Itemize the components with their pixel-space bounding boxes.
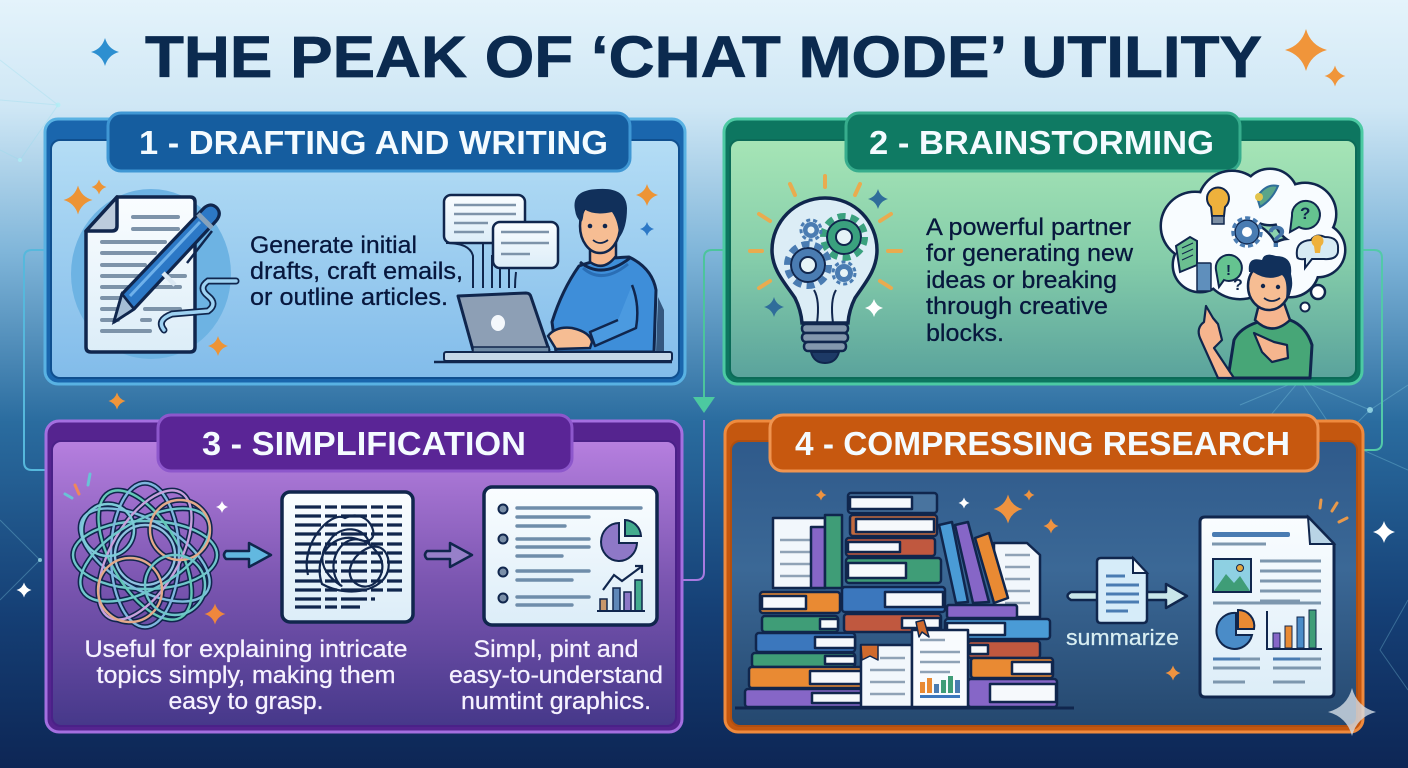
arrow: document to summary — [425, 543, 472, 567]
text: panel 3 left description: easy to grasp. — [168, 688, 324, 715]
text: panel 2 description: blocks. — [926, 320, 1004, 347]
icon: orange sparkle between panels — [108, 392, 126, 410]
icon: dense document with scribble — [282, 492, 413, 622]
centre stack — [842, 493, 945, 632]
text: panel 1 description — [250, 232, 463, 311]
text: panel 3 right description — [449, 636, 663, 715]
panel: drafting and writing — [45, 113, 685, 384]
heading tab 2 — [846, 113, 1240, 171]
panel: compressing research — [725, 415, 1363, 732]
icon: tangled knot — [65, 474, 228, 634]
icon: large orange sparkle top right — [1285, 29, 1327, 71]
icon: white sparkle right — [1373, 521, 1395, 543]
icon: stack of books and papers — [735, 490, 1074, 708]
text: panel 3 right description: numtint graphics. — [461, 688, 651, 715]
heading tab 3 — [158, 415, 572, 471]
arrow: summarize — [1068, 558, 1187, 623]
heading tab 1: 1 - DRAFTING AND WRITING — [139, 124, 608, 161]
connector: panel 2 down arrow — [693, 250, 723, 413]
icon: person with thought cloud: ? — [1300, 204, 1310, 223]
icon: person with thought cloud: ! — [1226, 262, 1231, 279]
icon: small orange sparkle — [1166, 666, 1180, 680]
icon: person at laptop with chat bubbles — [434, 184, 672, 362]
front papers — [861, 620, 968, 707]
icon: sparkle top left — [91, 38, 119, 66]
icon: small orange sparkle top right — [1324, 66, 1346, 86]
arrow: knot to document — [224, 543, 271, 567]
connector: panel 1 to panel 3 — [24, 250, 46, 470]
icon: person with thought cloud — [1162, 170, 1344, 378]
panel: brainstorming — [724, 113, 1362, 384]
heading tab 4: 4 - COMPRESSING RESEARCH — [795, 425, 1290, 462]
text: panel 3 left description — [84, 636, 408, 715]
connector: panel 2 to panel 4 — [1362, 250, 1382, 450]
text: panel 2 description: ideas or breaking — [926, 267, 1117, 294]
heading tab 1 — [108, 113, 630, 171]
icon: white sparkle left — [16, 582, 32, 598]
connector: panel 3 to middle — [682, 420, 704, 580]
heading tab 2: 2 - BRAINSTORMING — [869, 124, 1214, 161]
icon: person with thought cloud: ? — [1267, 219, 1286, 254]
left stack — [745, 592, 863, 707]
icon: simplified summary sheet — [484, 487, 657, 625]
icon: document and pen — [64, 180, 236, 359]
right stack — [945, 605, 1057, 707]
icon: summary report — [1200, 500, 1347, 697]
text: panel 3 right description: Simpl, pint and — [474, 636, 638, 663]
text: panel 2 description: for generating new — [926, 240, 1133, 267]
panel: simplification — [46, 415, 682, 732]
text: panel 1 description: Generate initial — [250, 232, 417, 259]
text: panel 3 left description: topics simply, making them — [96, 662, 396, 689]
heading tab 4 — [770, 415, 1318, 471]
icon: person with thought cloud: ? — [1233, 277, 1243, 294]
text: panel 3 left description: Useful for explaining intricate — [84, 636, 408, 663]
text: summarize: summarize — [1066, 625, 1179, 650]
text: panel 1 description: drafts, craft emails, — [250, 258, 463, 285]
icon: light bulb with gears — [750, 176, 901, 363]
heading tab 3: 3 - SIMPLIFICATION — [202, 425, 526, 462]
tilted books — [939, 522, 1008, 603]
text: panel 2 description — [926, 214, 1133, 347]
text: panel 2 description: through creative — [926, 293, 1108, 320]
text: panel 1 description: or outline articles. — [250, 284, 448, 311]
text: panel 3 right description: easy-to-understand — [449, 662, 663, 689]
text: panel 2 description: A powerful partner — [926, 214, 1131, 241]
icon: watermark sparkle — [1328, 688, 1376, 736]
title: THE PEAK OF ‘CHAT MODE’ UTILITY — [145, 25, 1262, 90]
